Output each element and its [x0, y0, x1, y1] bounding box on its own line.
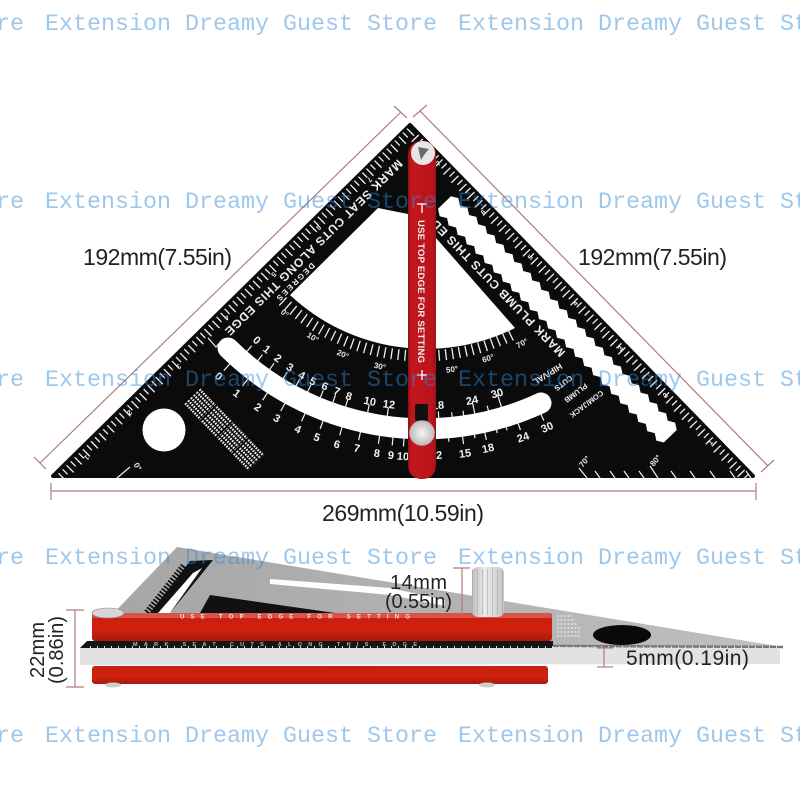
top red rail: USE TOP EDGE FOR SETTING: [180, 614, 410, 620]
side cut labels: COM/JACK: [567, 388, 605, 420]
upper pitch scale numbers: [250, 334, 505, 412]
dimension: plate 5mm: [597, 648, 613, 667]
table dots: [557, 616, 580, 636]
ruler edge numbers: 3: [174, 362, 182, 370]
ruler edge numbers: 4: [572, 300, 580, 308]
degree arc scale: 70°: [515, 337, 530, 350]
upper pitch scale numbers: 10: [363, 395, 377, 409]
lower pitch scale ticks: [224, 364, 544, 447]
edge ruler strip: MARK SEAT CUTS ALONG THIS EDGE: [133, 642, 417, 648]
label: overall thickness: [27, 616, 68, 684]
triangle body: [53, 125, 753, 476]
ruler edge numbers: 4: [222, 313, 230, 321]
lower pitch scale numbers: 12: [430, 450, 442, 462]
side cut labels: CUTS: [552, 373, 574, 393]
dimension: left edge 192mm: [34, 106, 407, 469]
top screw: [92, 608, 124, 618]
label: knob height: 14mm: [390, 572, 447, 594]
upper pitch scale numbers: 8: [344, 390, 353, 404]
upper pitch scale numbers: 7: [332, 385, 342, 399]
ruler edge numbers: [82, 160, 715, 461]
upper pitch scale numbers: 1: [260, 343, 272, 356]
upper pitch scale numbers: 5: [307, 375, 318, 389]
knurled knob: [472, 567, 504, 617]
ruler edge numbers: 5: [527, 254, 535, 262]
lower pitch scale numbers: 10: [396, 451, 409, 463]
lower pitch scale numbers: 18: [481, 442, 496, 456]
top pivot screw: [411, 141, 435, 165]
right edge ruler and text: MARK PLUMB CUTS THIS EDGE: [415, 203, 568, 360]
right edge ruler and text: [377, 137, 748, 515]
upper pitch scale numbers: 12: [382, 398, 396, 412]
left edge ruler and text: [61, 130, 432, 499]
ruler edge numbers: 3: [617, 345, 625, 353]
top red rail: [92, 613, 552, 641]
serrated slot: [435, 193, 680, 445]
degree arc scale: 0°: [279, 307, 291, 319]
degree arc scale: 10°: [305, 330, 320, 344]
rail window: [415, 404, 428, 421]
rail arrows: [417, 204, 427, 380]
watermark rows: Extension Dreamy Guest Store: [45, 12, 437, 38]
slot end mark: [208, 338, 222, 347]
ruler edge numbers: 5: [269, 270, 277, 278]
ruler edge numbers: 1: [707, 439, 715, 447]
lower pitch scale numbers: 5: [312, 431, 322, 445]
dimension: right edge 192mm: [413, 105, 774, 472]
ruler edge numbers: 2: [662, 392, 670, 400]
ruler edge numbers: 7: [365, 175, 373, 183]
bottom edge degree marks: [117, 453, 751, 478]
lower pitch scale numbers: 15: [458, 447, 472, 461]
lower pitch scale numbers: 2: [252, 401, 263, 415]
lower pitch scale numbers: 24: [516, 430, 532, 446]
lower pitch scale numbers: 0: [212, 370, 225, 383]
ruler edge numbers: 1: [82, 453, 90, 461]
ruler edge numbers: 2: [125, 408, 133, 416]
rafter table block: [184, 388, 265, 471]
lower pitch scale numbers: 4: [292, 423, 304, 437]
silver plate edge: [80, 648, 780, 665]
dimension: knob 14mm: [453, 568, 470, 615]
lower pitch scale numbers: [212, 370, 555, 463]
label: left edge length: 192mm(7.55in): [83, 244, 232, 270]
upper pitch scale ticks: [246, 346, 501, 418]
upper pitch scale numbers: 6: [320, 380, 330, 394]
serrated slot in perspective: [147, 560, 213, 613]
inner window cutout: [290, 208, 515, 349]
edge ruler strip: [80, 641, 783, 648]
label: plate thickness: 5mm(0.19in): [626, 647, 749, 670]
lower pitch scale numbers: 7: [353, 442, 361, 455]
watermark rows: Extension Dreamy Guest Store: [45, 724, 437, 750]
curved slot: [228, 348, 541, 429]
lower pitch scale numbers: 8: [373, 448, 381, 460]
label: right edge length: 192mm(7.55in): [578, 244, 727, 270]
panel: side view of tool: [80, 547, 783, 688]
label: knob height: [385, 572, 452, 613]
bottom edge degree marks: 70°: [577, 454, 592, 469]
bottom edge degree marks: 80°: [648, 453, 663, 468]
lower red rail: [92, 666, 548, 684]
upper pitch scale numbers: 0: [250, 334, 263, 347]
rail text: USE TOP EDGE FOR SETTING: [415, 220, 426, 363]
lower screws: [105, 682, 495, 688]
bottom edge degree marks: 0°: [132, 461, 143, 472]
side cut labels: HIP/VAL: [531, 361, 564, 387]
degree arc scale: 50°: [445, 364, 459, 375]
curved slot in perspective: [270, 579, 445, 606]
degree arc scale: 60°: [481, 352, 495, 365]
upper pitch scale numbers: 2: [271, 352, 283, 365]
upper pitch scale numbers: 24: [465, 394, 480, 408]
label: overall thickness: (0.86in): [46, 616, 68, 684]
side cut labels: [531, 361, 605, 420]
degree arc scale: 30°: [373, 361, 387, 372]
ruler edge numbers: 6: [480, 209, 488, 217]
watermark rows: Extension Dreamy Guest Store: [45, 546, 437, 572]
grey triangle surface: [100, 547, 783, 647]
upper pitch scale numbers: 4: [296, 369, 308, 383]
panel: rafter square front view: [53, 125, 753, 515]
lower pitch scale numbers: 1: [230, 387, 242, 400]
lower pitch scale numbers: 30: [539, 420, 555, 436]
upper pitch scale numbers: 3: [284, 361, 295, 375]
label: overall thickness: 22mm: [27, 622, 49, 678]
watermark rows: Extension Dreamy Guest Store: [45, 368, 437, 394]
upper pitch scale numbers: 30: [490, 386, 505, 401]
ruler edge numbers: 7: [435, 160, 443, 168]
ruler edge numbers: 6: [314, 223, 322, 231]
lock knob: [410, 420, 434, 446]
degree arc scale: [279, 301, 530, 375]
red pivot rail: [408, 141, 436, 479]
degree arc scale: 20°: [335, 348, 350, 361]
lower pitch scale numbers: 6: [332, 438, 341, 452]
left edge ruler and text: MARK SEAT CUTS ALONG THIS EDGE: [222, 157, 405, 338]
label: knob height: (0.55in): [385, 591, 452, 613]
label: base length: 269mm(10.59in): [322, 500, 484, 526]
dimension: base 269mm: [51, 483, 756, 500]
left edge ruler and text: DEGREES: [274, 261, 317, 303]
side cut labels: PLUMB: [562, 381, 589, 405]
dimension: thickness 22mm: [66, 610, 84, 687]
lower pitch scale numbers: 3: [271, 412, 282, 426]
round hole: [142, 408, 186, 452]
upper pitch scale numbers: 18: [432, 400, 445, 412]
hole: [593, 625, 651, 645]
inner window in perspective: [200, 595, 335, 613]
lower pitch scale numbers: 9: [387, 450, 395, 462]
watermark rows: Extension Dreamy Guest Store: [45, 190, 437, 216]
